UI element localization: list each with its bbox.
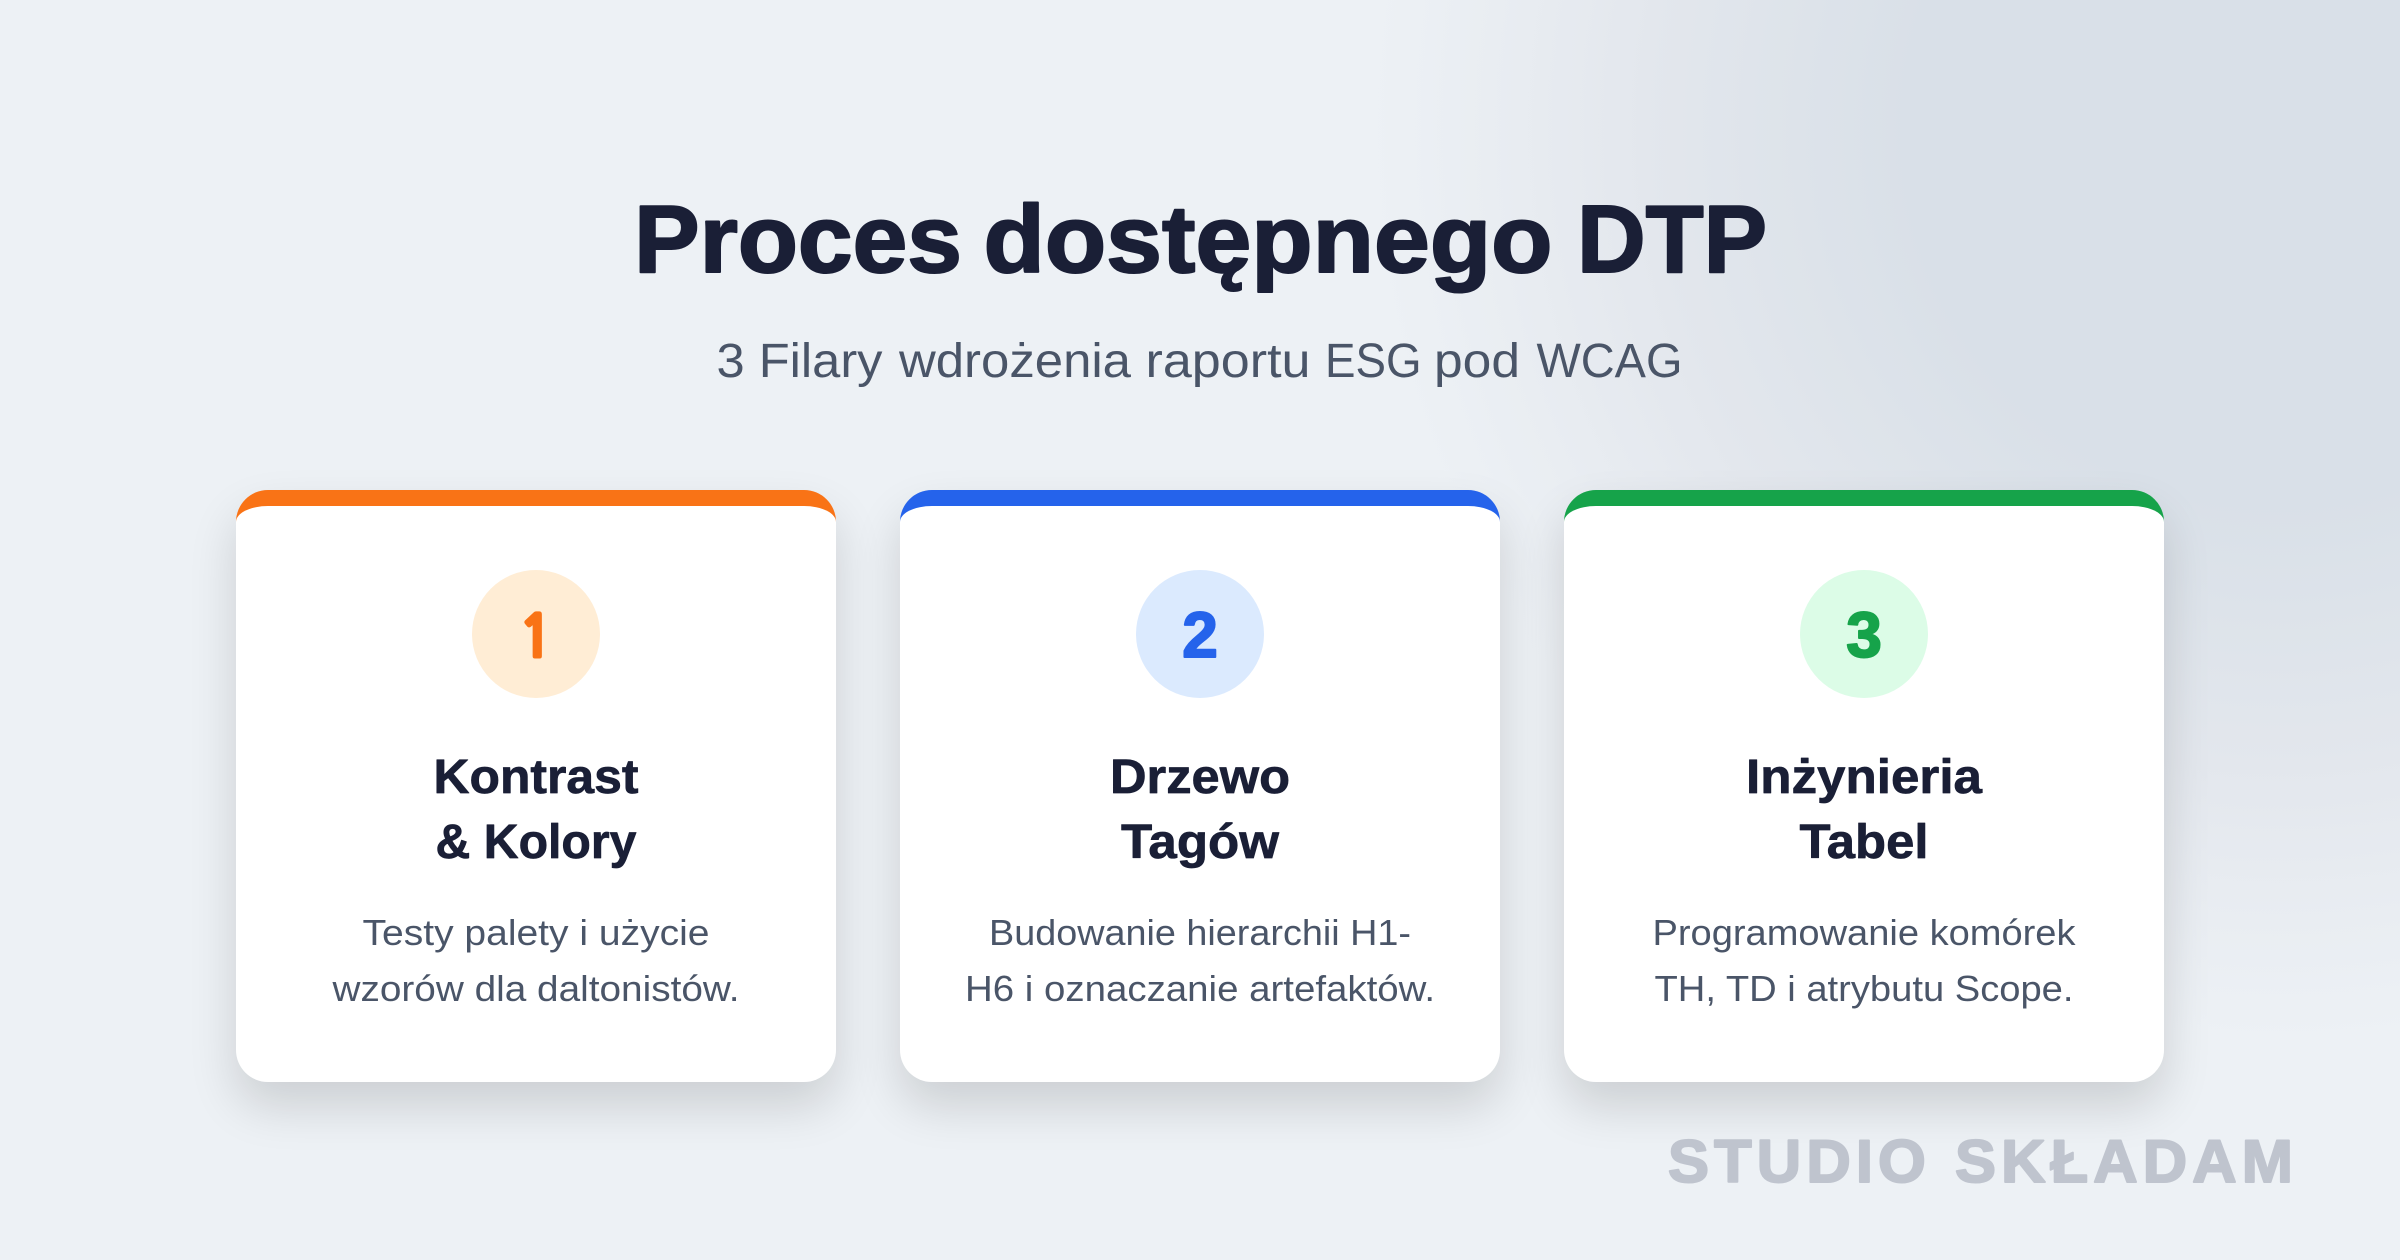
heading: Kontrast & Kolory: & Kolory: [436, 816, 637, 869]
heading: Inzynieria Tabel: Inżynieria: [1746, 751, 1982, 804]
watermark: studio name: STUDIO: [1668, 1128, 1931, 1195]
subtitle: pod: [1434, 335, 1520, 388]
number badge 3: [1800, 570, 1928, 698]
heading: Kontrast & Kolory: Kontrast: [434, 751, 639, 804]
heading: Inzynieria Tabel: Tabel: [1800, 816, 1928, 869]
subtitle: WCAG: [1536, 335, 1682, 388]
heading: Kontrast & Kolory: [434, 751, 639, 869]
subtitle: ESG: [1325, 335, 1422, 388]
number badge 1: [472, 570, 600, 698]
subtitle: 3 Filary: [716, 335, 882, 388]
panel: kontrast i kolory: [236, 490, 836, 1082]
subtitle: raportu: [1146, 335, 1310, 388]
description: Testy palety i użycie: [362, 912, 710, 953]
description: H6 i oznaczanie artefaktów.: [965, 968, 1435, 1009]
heading: Drzewo Tagow: Drzewo: [1110, 751, 1290, 804]
number badge 1: 1: [518, 608, 554, 666]
title: dostępnego: [984, 186, 1552, 293]
subtitle: [716, 335, 1682, 388]
description: [331, 912, 739, 1009]
heading: Inzynieria Tabel: [1746, 751, 1983, 869]
panel: drzewo tagow: [900, 490, 1500, 1082]
title: DTP: [1577, 186, 1767, 293]
number badge 3: 3: [1846, 599, 1882, 671]
number badge 2: [1136, 570, 1264, 698]
heading: Drzewo Tagow: [1110, 751, 1290, 869]
watermark: studio name: [1668, 1128, 2298, 1195]
description: wzorów dla daltonistów.: [331, 968, 739, 1009]
number badge 2: 2: [1182, 599, 1218, 671]
description: [965, 912, 1435, 1009]
title: Proces: [634, 186, 962, 293]
description: Budowanie hierarchii H1-: [989, 912, 1411, 953]
panel: inzynieria tabel: [1564, 490, 2164, 1082]
description: TH, TD i atrybutu Scope.: [1654, 968, 2074, 1009]
subtitle: wdrożenia: [898, 335, 1131, 388]
description: Programowanie komórek: [1652, 912, 2077, 953]
heading: Drzewo Tagow: Tagów: [1121, 816, 1280, 869]
title: [634, 186, 1767, 294]
watermark: studio name: SKŁADAM: [1955, 1128, 2298, 1195]
description: [1652, 912, 2077, 1009]
